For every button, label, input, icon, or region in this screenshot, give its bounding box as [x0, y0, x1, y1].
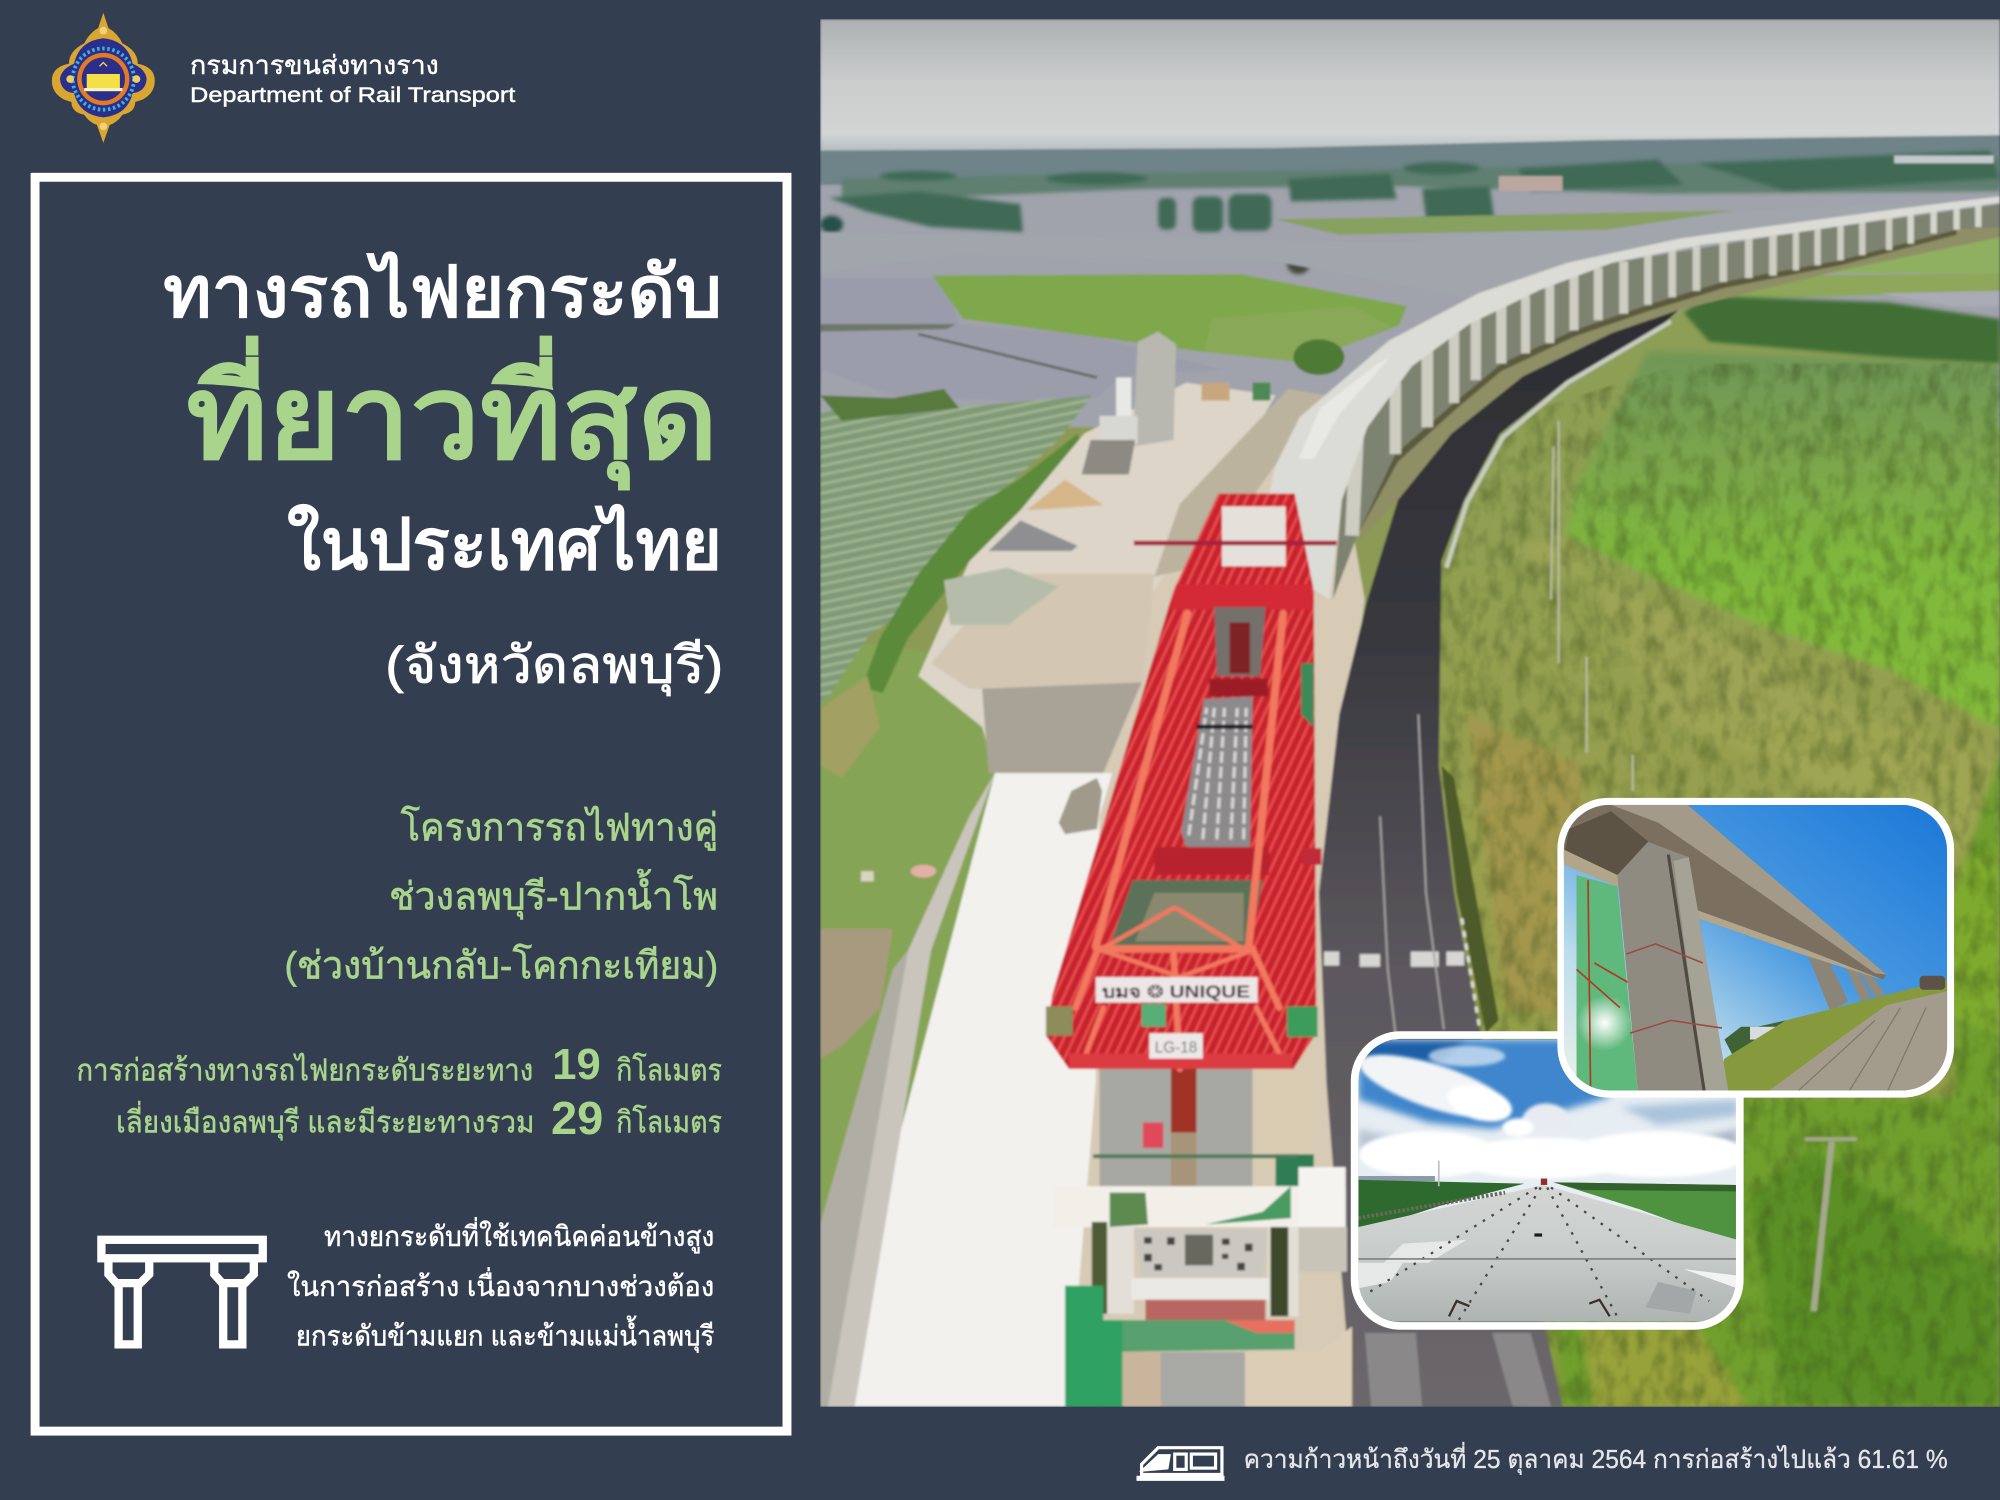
grass texture	[1429, 357, 2000, 1407]
progress note: ความก้าวหน้าถึงวันที่ 25 ตุลาคม 2564 การก่อสร้างไปแล้ว 61.61 %	[1244, 1442, 1948, 1475]
inset photo: concrete deck under blue sky	[1353, 1040, 1747, 1321]
road	[1319, 310, 1679, 1407]
construction ground	[918, 383, 1276, 773]
technique description	[287, 1217, 714, 1354]
distance statistics: การก่อสร้างทางรถไฟยกระดับระยะทาง	[77, 1052, 533, 1087]
green field middle	[932, 274, 1407, 362]
technique description: ทางยกระดับที่ใช้เทคนิคค่อนข้างสูง	[324, 1217, 714, 1254]
ground grass	[1716, 980, 1948, 1091]
deck stains	[1384, 1240, 1467, 1263]
lower left grass	[820, 689, 883, 708]
site soil base	[1078, 464, 1366, 1354]
project name: โครงการรถไฟทางคู่	[401, 806, 718, 851]
strip beside road	[1357, 219, 2000, 542]
technique description: ในการก่อสร้าง เนื่องจากบางช่วงต้อง	[287, 1267, 714, 1302]
main panel frame	[35, 177, 787, 1431]
road shoulder shade	[1441, 765, 1499, 1033]
concrete segment load	[1181, 696, 1253, 847]
viaduct deck	[1265, 196, 2000, 599]
viaduct piers	[1352, 204, 1978, 536]
far right tree line	[1684, 296, 2000, 364]
tan soil strips	[1122, 1352, 1161, 1407]
inset photo: viaduct pier from below	[1564, 805, 1948, 1091]
red launching gantry	[1046, 494, 1337, 1069]
right far fields	[1811, 235, 2000, 273]
distance statistics	[77, 1041, 722, 1144]
title	[163, 250, 723, 696]
far tree belts	[820, 151, 2000, 274]
distant strip	[1358, 1176, 1435, 1181]
material trailer	[1059, 778, 1102, 834]
road curb	[1446, 321, 1671, 568]
road gantry shadow	[1365, 1333, 1551, 1407]
deck seams	[1367, 1188, 1709, 1321]
photo base ground	[820, 383, 2000, 1407]
gantry sign: บมจ ❂ UNIQUE	[1102, 981, 1250, 1001]
green hedges	[866, 434, 1080, 694]
gantry crossbar	[1134, 541, 1337, 545]
far piers	[1805, 943, 1848, 1011]
logo blue field	[60, 38, 147, 117]
title: ทางรถไฟยกระดับ	[163, 250, 722, 332]
tall poles	[1551, 421, 1633, 791]
blue sky patches	[1358, 1040, 1737, 1158]
pale buildings	[1499, 176, 1562, 191]
clouds	[1353, 1042, 1747, 1179]
gantry sign LG: LG-18	[1155, 1039, 1197, 1056]
logo gold body	[52, 13, 155, 143]
logo: Department of Rail Transport seal	[52, 13, 155, 143]
title: ในประเทศไทย	[287, 503, 722, 585]
left grass base	[830, 644, 992, 1094]
project name: (ช่วงบ้านกลับ-โคกกะเทียม)	[284, 943, 718, 987]
inset frame: concrete deck	[1355, 1035, 1740, 1326]
utility pole	[1814, 1142, 1832, 1311]
distance statistics: เลี่ยงเมืองลพบุรี และมีระยะทางรวม	[116, 1101, 534, 1142]
fence	[1358, 1193, 1505, 1218]
gantry chords	[1075, 614, 1283, 1069]
icon: train	[1136, 1448, 1224, 1481]
road markings	[1324, 952, 1464, 967]
embankment strip	[1154, 389, 1327, 577]
cement batching plant	[1082, 332, 1270, 474]
icon: viaduct	[101, 1240, 263, 1344]
technique description: ยกระดับข้ามแยก และข้ามแม่น้ำลพบุรี	[296, 1316, 714, 1354]
title: (จังหวัดลพบุรี)	[385, 636, 723, 696]
water fields	[822, 230, 1313, 269]
project name	[284, 806, 718, 987]
distant horizon	[820, 134, 2000, 186]
logo train	[87, 74, 120, 88]
header text: department name: กรมการขนส่งทางราง	[190, 52, 439, 80]
under-viaduct shade	[1333, 204, 2000, 599]
main pier	[1617, 842, 1728, 1091]
background trees and wall	[1724, 1020, 1786, 1071]
gantry sign LG	[1149, 1033, 1203, 1059]
gantry sign	[1096, 977, 1258, 1003]
header text: department name	[190, 52, 515, 107]
green patches and bottom beam	[1142, 1004, 1166, 1027]
girder	[1564, 805, 1886, 980]
inset frame background: viaduct pier	[1557, 798, 1954, 1098]
flooded plain	[820, 185, 2000, 427]
right green field and grass	[1439, 306, 2000, 1407]
title: ที่ยาวที่สุด	[186, 335, 718, 491]
distance statistics: กิโลเมตร	[616, 1052, 722, 1087]
concrete pier and works below gantry	[1099, 1069, 1253, 1190]
distance statistics: กิโลเมตร	[616, 1105, 722, 1140]
white concrete strip	[828, 773, 1112, 1407]
header text: department name: Department of Rail Transport	[190, 82, 515, 107]
distance statistics: 29	[551, 1092, 603, 1144]
sky	[820, 19, 2000, 153]
left rice field	[820, 395, 1092, 709]
project name: ช่วงลพบุรี-ปากน้ำโพ	[389, 868, 718, 919]
scaffold green	[1577, 875, 1638, 1091]
photo: aerial view of viaduct construction	[820, 19, 2000, 1407]
distance statistics: 19	[552, 1041, 601, 1089]
